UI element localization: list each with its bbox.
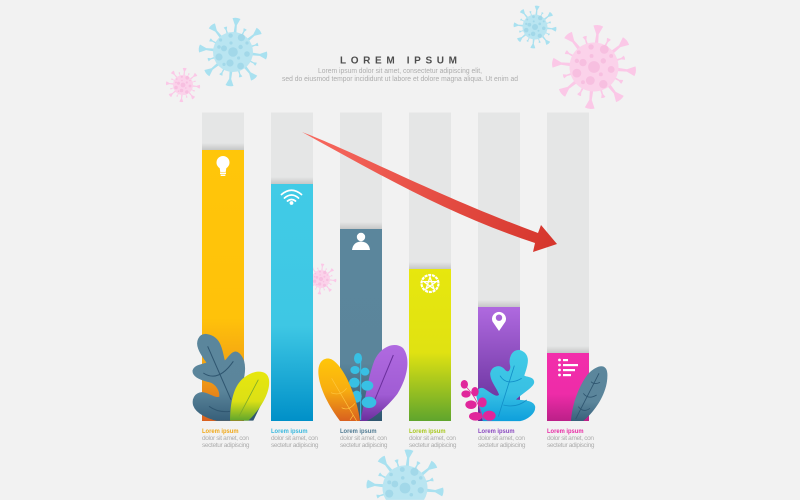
icon: list [558,359,578,376]
bar 1: yellow [202,112,244,421]
label: column 3: sectetur adipiscing [340,442,388,449]
label: column 1: dolor sit amet, con [202,435,249,442]
label: column 6: Lorem ipsum [547,428,584,435]
label: column 6: dolor sit amet, con [547,435,594,442]
label: column 4: dolor sit amet, con [409,435,456,442]
label: column 2: dolor sit amet, con [271,435,318,442]
plant: orange and purple leaves with blue sprig [318,345,407,421]
label: column 5: Lorem ipsum [478,428,515,435]
subtitle text [282,68,518,83]
subtitle text: Lorem ipsum dolor sit amet, consectetur adipiscing elit, [318,68,482,75]
title: LOREM IPSUM [340,56,457,66]
label: column 2: sectetur adipiscing [271,442,319,449]
subtitle text: sed do eiusmod tempor incididunt ut labore et dolore magna aliqua. Ut enim ad [282,76,518,83]
arrow: downward trend [302,132,557,252]
label: column 3 [340,428,388,449]
label: column 1: sectetur adipiscing [202,442,250,449]
plant: steel oak leaf with yellow leaf [193,335,269,421]
bar 4: lime [409,112,451,421]
label: column 4: sectetur adipiscing [409,442,457,449]
virus: small blue top right [513,5,557,49]
icon: gear wheel [422,275,438,292]
label: column 5 [478,428,526,449]
label: column 5: dolor sit amet, con [478,435,525,442]
virus: large pink top right [552,25,636,109]
virus: small pink left [166,68,200,102]
bar 6: pink [547,112,589,421]
label: column 6 [547,428,595,449]
icon: light bulb [216,156,230,176]
label: column 2 [271,428,319,449]
bar 3: steel [340,112,382,421]
bar 5: purple [478,112,520,421]
plant: blue oak leaf with magenta sprig [461,351,534,421]
plant: steel leaf on pink bar [571,366,607,421]
virus: blue bottom [366,449,444,500]
label: column 3: dolor sit amet, con [340,435,387,442]
virus: small pink centre [305,263,337,295]
bar 2: blue [271,112,313,421]
virus: large blue top left [198,17,268,87]
label: column 4: Lorem ipsum [409,428,446,435]
label: column 3: Lorem ipsum [340,428,377,435]
label: column 1 [202,428,250,449]
icon: map pin [492,312,506,331]
label: column 6: sectetur adipiscing [547,442,595,449]
icon: wifi [282,190,302,204]
label: column 4 [409,428,457,449]
label: column 2: Lorem ipsum [271,428,308,435]
label: column 1: Lorem ipsum [202,428,239,435]
icon: person [352,233,370,250]
label: column 5: sectetur adipiscing [478,442,526,449]
